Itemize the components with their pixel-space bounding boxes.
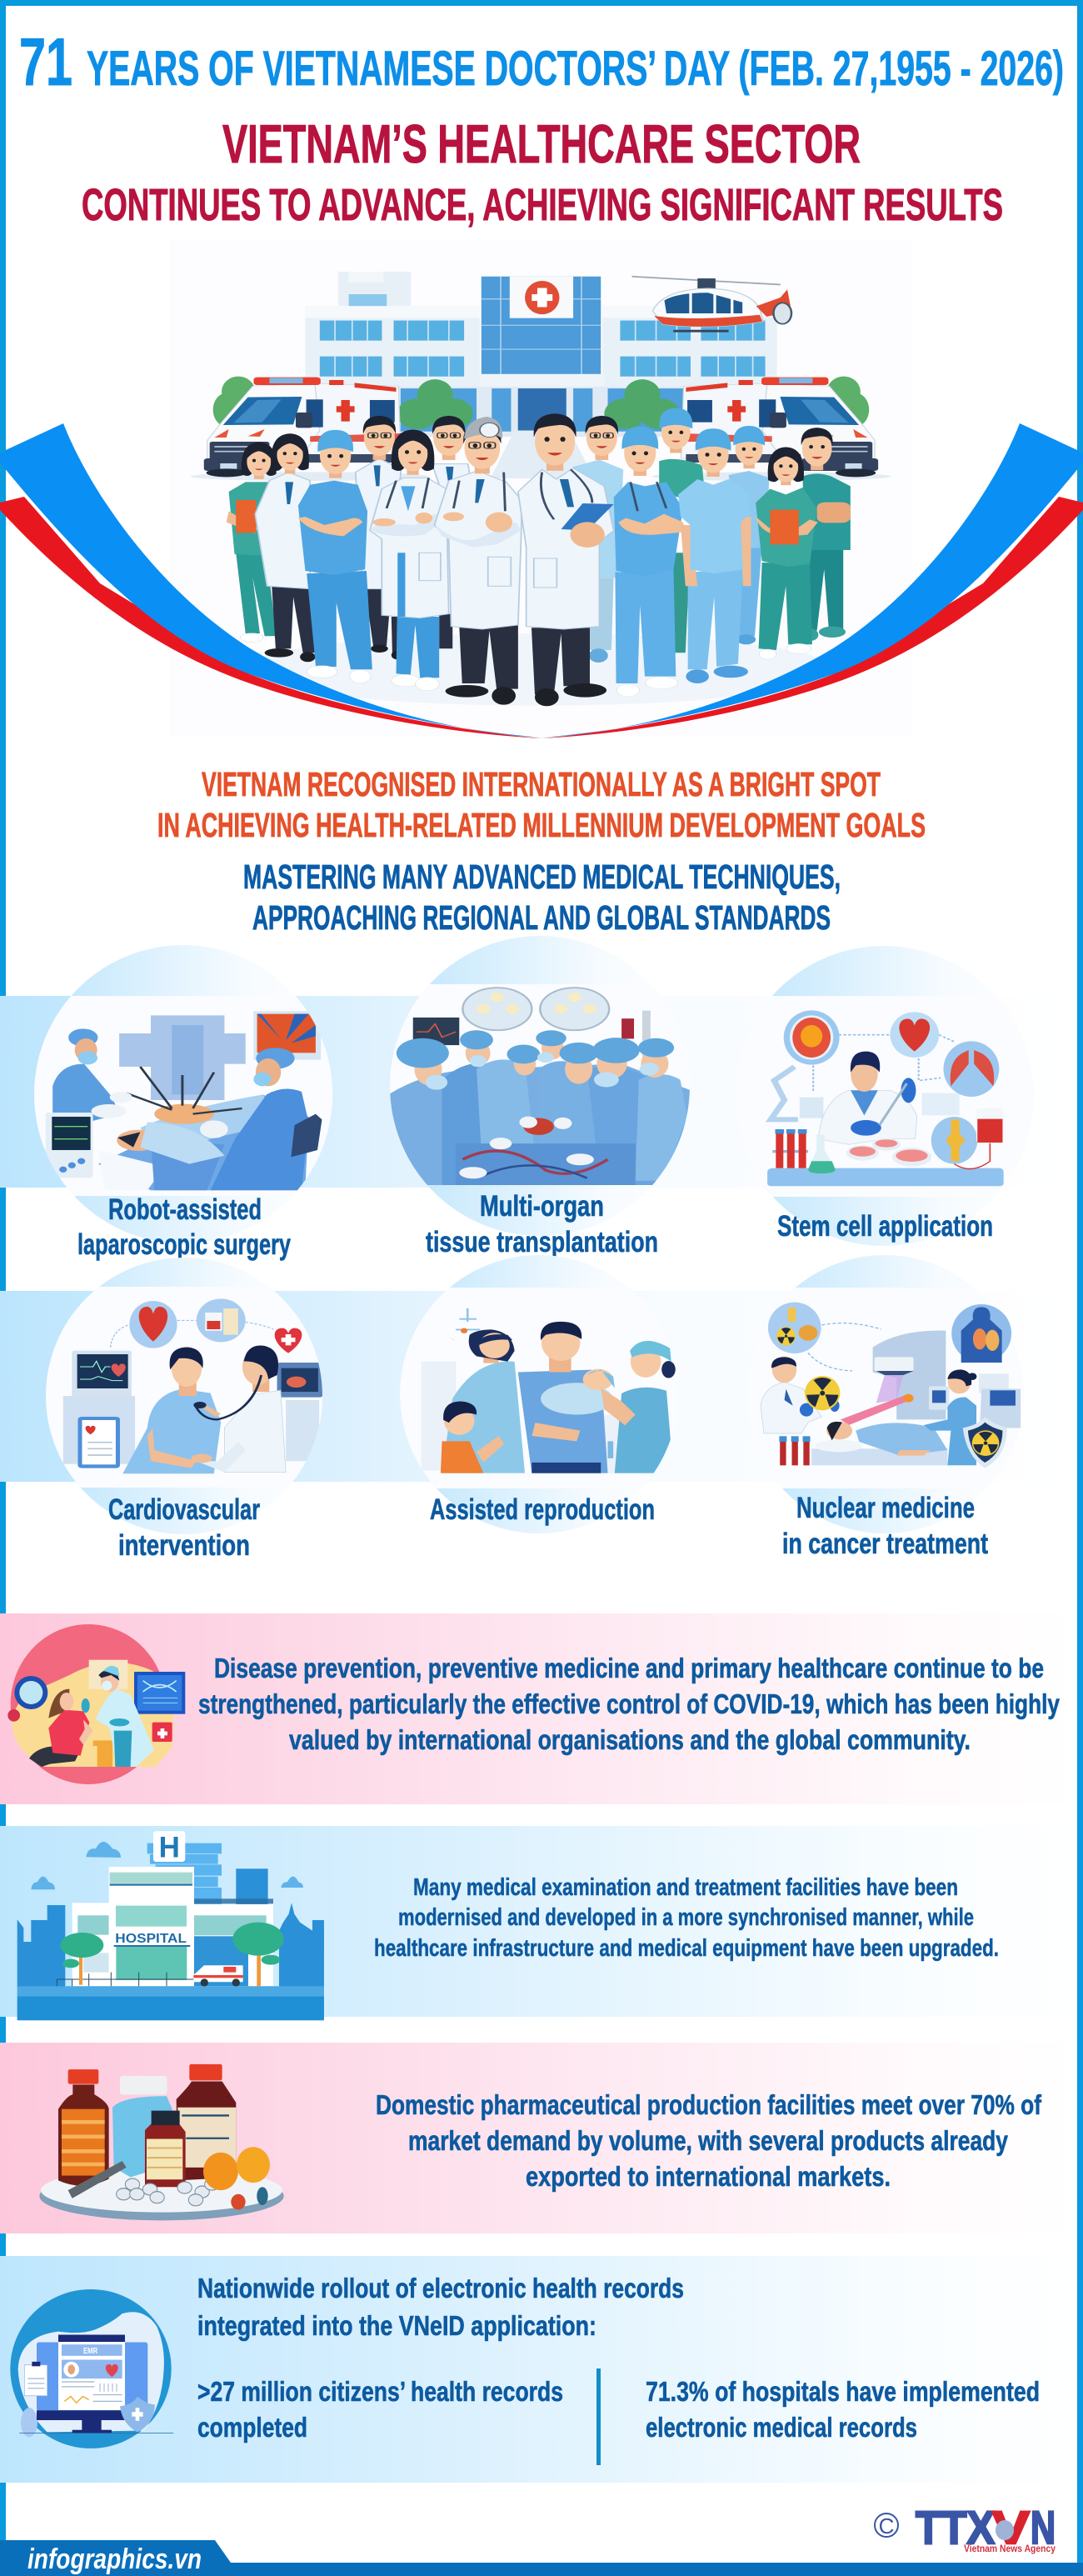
panel: medical facilities bbox=[0, 1826, 1076, 2020]
text bbox=[198, 1653, 1061, 1755]
hero illustration: hospital, ambulances and medical staff bbox=[169, 239, 912, 737]
logo: TTXVN Vietnam News Agency: TTX bbox=[916, 2501, 995, 2553]
caption: laparoscopic surgery bbox=[77, 1228, 291, 1261]
orange heading: bright spot bbox=[157, 765, 926, 844]
side staff bbox=[227, 433, 818, 662]
title: 71 years of Vietnamese Doctors' Day: 71 bbox=[19, 25, 72, 100]
footer bar with infographics.vn: infographics.vn bbox=[27, 2543, 202, 2575]
hospital building bbox=[305, 272, 777, 478]
panel: cardiovascular intervention bbox=[46, 1258, 322, 1562]
logo: TTXVN Vietnam News Agency bbox=[875, 2501, 1056, 2554]
ambulance right bbox=[681, 378, 878, 477]
caption: Cardiovascular bbox=[108, 1493, 260, 1526]
caption: in cancer treatment bbox=[782, 1528, 988, 1560]
helicopter bbox=[632, 277, 791, 331]
panel: electronic health records bbox=[0, 2256, 1076, 2483]
caption bbox=[77, 1193, 291, 1261]
panel: robot-assisted laparoscopic surgery bbox=[34, 945, 332, 1261]
icon: EMR monitor: EMR bbox=[83, 2345, 97, 2355]
panel: domestic pharmaceuticals bbox=[0, 2043, 1076, 2233]
heading text bbox=[197, 2273, 684, 2341]
title: 71 years of Vietnamese Doctors' Day bbox=[19, 25, 1064, 100]
illustration: surgical team bbox=[387, 988, 691, 1188]
caption bbox=[426, 1190, 658, 1258]
text: exported to international markets. bbox=[526, 2161, 891, 2192]
heading: Vietnam's healthcare sector bbox=[82, 113, 1003, 230]
caption: intervention bbox=[118, 1529, 250, 1562]
logo: TTXVN Vietnam News Agency: C bbox=[879, 2513, 894, 2538]
panel: stem cell application bbox=[734, 946, 1034, 1246]
ambulance left bbox=[204, 378, 401, 477]
illustration: family with newborn bbox=[422, 1308, 676, 1473]
caption bbox=[782, 1492, 988, 1560]
statistic: hospitals with electronic records bbox=[646, 2376, 1040, 2443]
caption: Robot-assisted bbox=[108, 1193, 262, 1226]
caption bbox=[108, 1493, 260, 1562]
icon: vaccination bbox=[7, 1624, 185, 1784]
icon: EMR monitor bbox=[10, 2289, 173, 2448]
panel: disease prevention bbox=[0, 1613, 1076, 1804]
footer bar with infographics.vn bbox=[0, 2540, 1083, 2576]
illustration: cardiology consultation bbox=[63, 1298, 322, 1473]
panel: assisted reproduction bbox=[400, 1255, 678, 1533]
statistic: citizens' health records bbox=[197, 2376, 563, 2443]
caption: Stem cell application bbox=[777, 1210, 993, 1243]
icon: hospital: HOSPITAL bbox=[115, 1932, 187, 1946]
logo: TTXVN Vietnam News Agency: V bbox=[992, 2501, 1030, 2553]
technique band: row one bbox=[0, 996, 1076, 1188]
caption: Nuclear medicine bbox=[796, 1492, 975, 1524]
illustration: radiotherapy bbox=[761, 1303, 1021, 1468]
ribbon: right blue and red bbox=[542, 423, 1083, 738]
icon: hospital bbox=[17, 1831, 324, 2020]
illustration: scientist and organs bbox=[767, 1010, 1004, 1186]
heading text: Nationwide rollout of electronic health records bbox=[197, 2273, 684, 2303]
caption: tissue transplantation bbox=[426, 1226, 658, 1258]
front row staff bbox=[298, 413, 751, 706]
logo: TTXVN Vietnam News Agency: Vietnam News Agency bbox=[964, 2543, 1056, 2554]
back row staff bbox=[356, 408, 851, 663]
icon: medicine bottles bbox=[39, 2064, 284, 2220]
illustration: robot surgery bbox=[46, 1011, 322, 1190]
panel: multi-organ tissue transplantation bbox=[387, 936, 691, 1258]
logo: TTXVN Vietnam News Agency: N bbox=[1031, 2501, 1056, 2553]
statistic: hospitals with electronic records: electronic medical records bbox=[646, 2412, 917, 2443]
statistic: citizens' health records: >27 million citizens’ health records bbox=[197, 2376, 563, 2407]
text bbox=[374, 1874, 999, 1962]
caption: Multi-organ bbox=[480, 1190, 604, 1223]
statistic: citizens' health records: completed bbox=[197, 2412, 307, 2443]
icon: hospital: H bbox=[159, 1831, 180, 1863]
ambulances and staff bbox=[191, 377, 891, 706]
technique band: row two bbox=[0, 1291, 1076, 1482]
ribbon: left blue and red bbox=[0, 423, 542, 738]
text bbox=[376, 2089, 1042, 2192]
heading text: integrated into the VNeID application: bbox=[197, 2310, 596, 2341]
panel: nuclear medicine in cancer treatment bbox=[746, 1255, 1024, 1560]
caption: Assisted reproduction bbox=[430, 1493, 655, 1526]
blue heading: advanced medical techniques bbox=[243, 858, 841, 937]
